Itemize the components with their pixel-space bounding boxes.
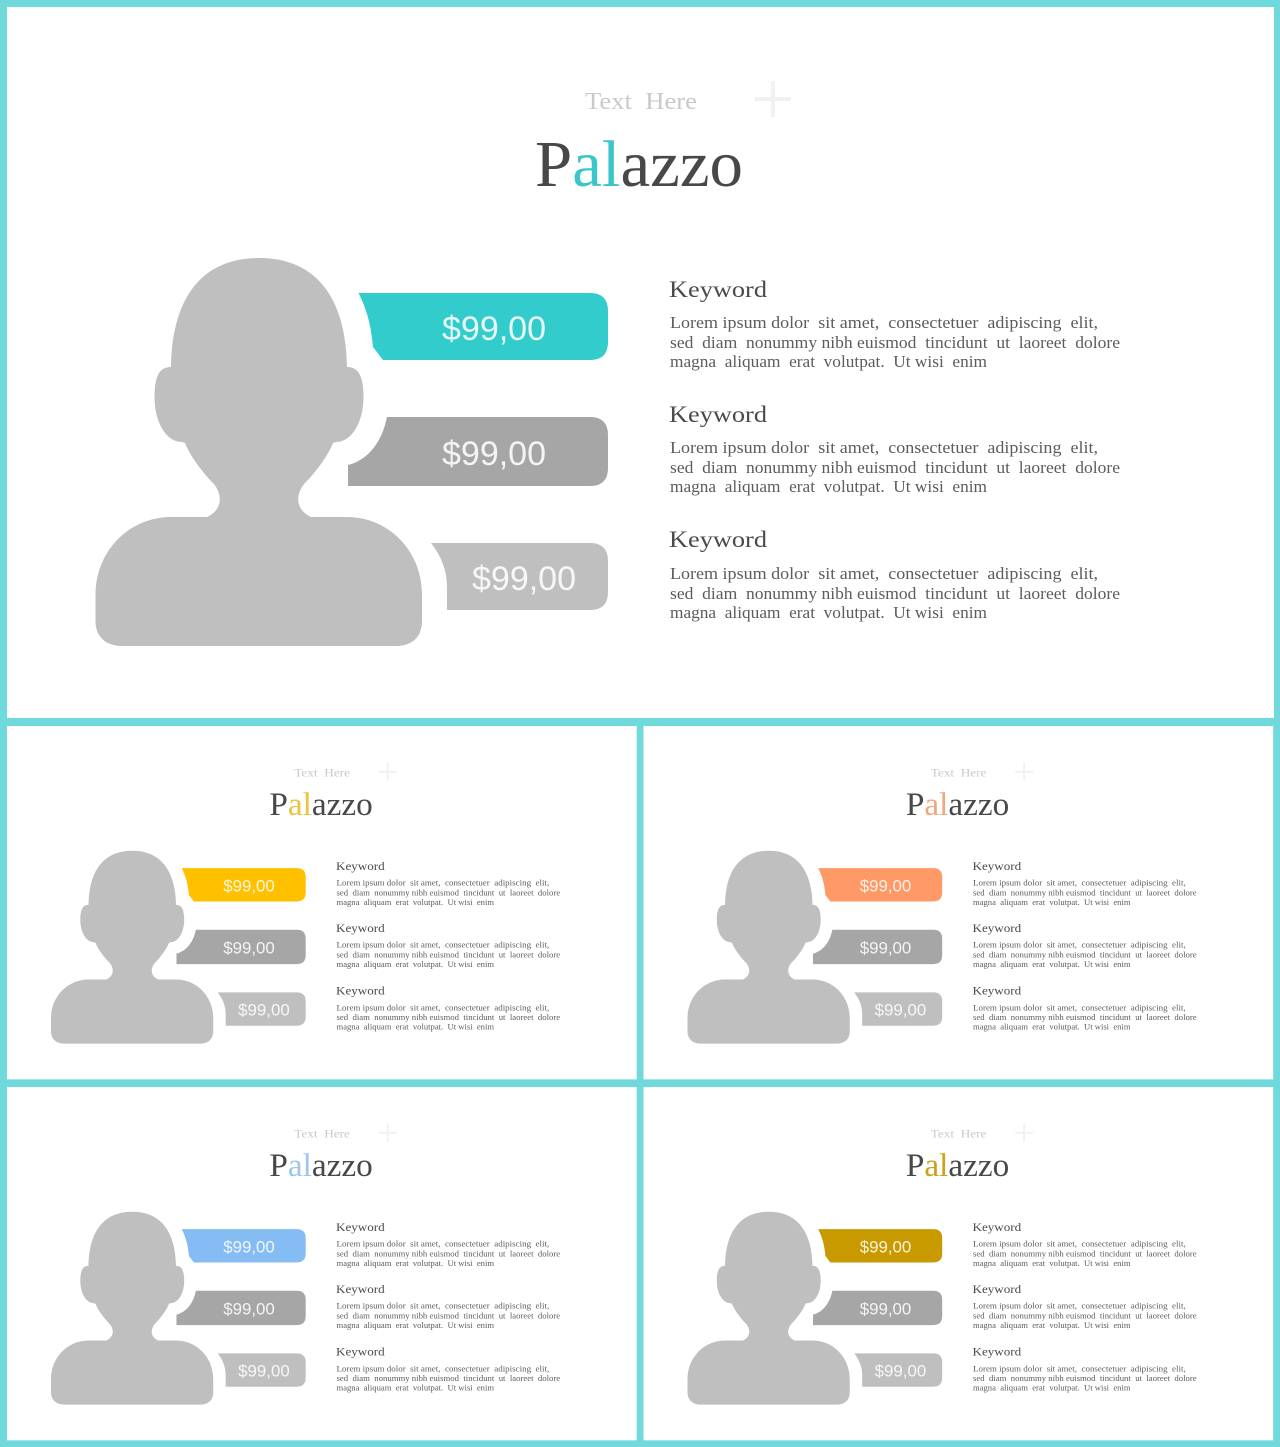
subtitle: Text Here — [585, 89, 697, 115]
price tag 3 — [218, 992, 306, 1026]
text block 2: Lorem ipsum dolor sit amet, consectetuer adipiscing elit, — [973, 940, 1186, 950]
text block 3: Lorem ipsum dolor sit amet, consectetuer adipiscing elit, — [973, 1002, 1186, 1012]
title: Palazzo — [906, 787, 1009, 823]
text block 2: sed diam nonummy nibh euismod tincidunt ut laoreet dolore — [337, 1311, 560, 1321]
price tag 3 — [854, 1353, 942, 1387]
text block 2 — [336, 1283, 560, 1330]
text block 3: Lorem ipsum dolor sit amet, consectetuer adipiscing elit, — [337, 1002, 549, 1012]
price tag 2: $99,00 — [223, 939, 275, 958]
price tag 1 — [182, 868, 306, 901]
text block 3 — [669, 527, 1120, 622]
text block 3: magna aliquam erat volutpat. Ut wisi enim — [337, 1022, 495, 1032]
price tag 2: $99,00 — [223, 1300, 275, 1319]
text block 3: Lorem ipsum dolor sit amet, consectetuer adipiscing elit, — [337, 1363, 549, 1373]
text block 1: Keyword — [973, 1221, 1021, 1234]
text block 1: Lorem ipsum dolor sit amet, consectetuer adipiscing elit, — [670, 313, 1098, 332]
text block 1: Keyword — [669, 277, 767, 303]
text block 1: Lorem ipsum dolor sit amet, consectetuer adipiscing elit, — [337, 1239, 549, 1249]
text block 1: Keyword — [973, 860, 1021, 873]
text block 1: sed diam nonummy nibh euismod tincidunt ut laoreet dolore — [973, 887, 1197, 897]
text block 2: magna aliquam erat volutpat. Ut wisi enim — [973, 1320, 1131, 1330]
text block 2: magna aliquam erat volutpat. Ut wisi enim — [973, 959, 1131, 969]
text block 2: Lorem ipsum dolor sit amet, consectetuer adipiscing elit, — [337, 940, 549, 950]
text block 2: Keyword — [669, 402, 767, 428]
text block 2 — [669, 402, 1120, 496]
text block 3: sed diam nonummy nibh euismod tincidunt ut laoreet dolore — [670, 584, 1120, 603]
text block 1 — [973, 860, 1197, 907]
subtitle: Text Here — [294, 766, 350, 780]
text block 3: sed diam nonummy nibh euismod tincidunt ut laoreet dolore — [973, 1373, 1197, 1383]
text block 1 — [669, 277, 1120, 371]
price tag 1: $99,00 — [223, 1238, 275, 1257]
price tag 2 — [813, 1291, 942, 1325]
price tag 3: $99,00 — [875, 1001, 926, 1020]
icon: person silhouette — [687, 1212, 850, 1405]
text block 1 — [336, 860, 560, 907]
text block 1: Keyword — [336, 860, 385, 873]
text block 3: Keyword — [336, 1345, 385, 1358]
text block 3: Keyword — [669, 527, 767, 553]
price tag 2: $99,00 — [860, 1300, 911, 1319]
price tag 2 — [176, 1291, 306, 1325]
text block 2: Keyword — [973, 922, 1021, 935]
text block 3: Keyword — [973, 1345, 1021, 1358]
text block 3: Keyword — [973, 984, 1021, 997]
icon: plus — [379, 1124, 397, 1142]
panel: yellow slide — [7, 726, 637, 1079]
text block 3: sed diam nonummy nibh euismod tincidunt ut laoreet dolore — [337, 1373, 560, 1383]
title: Palazzo — [906, 1148, 1009, 1184]
text block 3: Lorem ipsum dolor sit amet, consectetuer adipiscing elit, — [670, 564, 1098, 583]
title: Palazzo — [269, 787, 373, 823]
price tag 2 — [176, 930, 306, 964]
icon: plus — [1015, 1124, 1033, 1142]
price tag 1 — [358, 293, 608, 360]
text block 1 — [973, 1221, 1197, 1268]
text block 1: magna aliquam erat volutpat. Ut wisi enim — [973, 897, 1131, 907]
title: Palazzo — [535, 128, 743, 201]
text block 2: sed diam nonummy nibh euismod tincidunt ut laoreet dolore — [670, 458, 1120, 477]
price tag 2 — [348, 417, 608, 486]
price tag 3 — [218, 1353, 306, 1387]
text block 3: Keyword — [336, 984, 385, 997]
text block 2: magna aliquam erat volutpat. Ut wisi enim — [337, 1320, 495, 1330]
price tag 1 — [818, 868, 942, 901]
text block 2: Keyword — [973, 1283, 1021, 1296]
text block 3: magna aliquam erat volutpat. Ut wisi enim — [973, 1022, 1131, 1032]
panel: blue slide — [7, 1087, 637, 1440]
panel: gold slide — [644, 1087, 1273, 1440]
price tag 3 — [854, 992, 942, 1026]
title: Palazzo — [269, 1148, 373, 1184]
text block 2: magna aliquam erat volutpat. Ut wisi enim — [337, 959, 495, 969]
text block 3: sed diam nonummy nibh euismod tincidunt ut laoreet dolore — [337, 1012, 560, 1022]
price tag 3: $99,00 — [238, 1001, 290, 1020]
text block 3 — [973, 1345, 1197, 1393]
text block 1: sed diam nonummy nibh euismod tincidunt ut laoreet dolore — [337, 1248, 560, 1258]
text block 2: Lorem ipsum dolor sit amet, consectetuer adipiscing elit, — [337, 1301, 549, 1311]
price tag 3 — [431, 543, 608, 610]
text block 3 — [973, 984, 1197, 1032]
text block 1: magna aliquam erat volutpat. Ut wisi enim — [337, 1258, 495, 1268]
text block 2: magna aliquam erat volutpat. Ut wisi enim — [670, 477, 987, 496]
text block 1: magna aliquam erat volutpat. Ut wisi enim — [337, 897, 495, 907]
panel: orange slide — [644, 726, 1273, 1079]
price tag 1 — [818, 1229, 942, 1262]
text block 2: sed diam nonummy nibh euismod tincidunt ut laoreet dolore — [973, 950, 1197, 960]
text block 3 — [336, 1345, 560, 1393]
price tag 1: $99,00 — [860, 1238, 911, 1257]
icon: person silhouette — [51, 1212, 213, 1405]
text block 1: magna aliquam erat volutpat. Ut wisi enim — [973, 1258, 1131, 1268]
icon: person silhouette — [96, 258, 422, 646]
subtitle: Text Here — [294, 1127, 350, 1141]
icon: plus — [755, 81, 791, 117]
text block 2: Keyword — [336, 1283, 385, 1296]
text block 2 — [336, 922, 560, 969]
text block 1: sed diam nonummy nibh euismod tincidunt ut laoreet dolore — [670, 333, 1120, 352]
text block 2: Lorem ipsum dolor sit amet, consectetuer adipiscing elit, — [670, 438, 1098, 457]
icon: plus — [379, 763, 397, 781]
panel: main slide teal — [7, 7, 1274, 718]
subtitle: Text Here — [931, 766, 986, 780]
icon: plus — [1015, 763, 1033, 781]
text block 2: Lorem ipsum dolor sit amet, consectetuer adipiscing elit, — [973, 1301, 1186, 1311]
price tag 3: $99,00 — [472, 560, 576, 598]
text block 2: Keyword — [336, 922, 385, 935]
icon: person silhouette — [51, 851, 213, 1044]
text block 2: sed diam nonummy nibh euismod tincidunt ut laoreet dolore — [973, 1311, 1197, 1321]
text block 2: sed diam nonummy nibh euismod tincidunt ut laoreet dolore — [337, 950, 560, 960]
text block 1: sed diam nonummy nibh euismod tincidunt ut laoreet dolore — [337, 887, 560, 897]
text block 1: sed diam nonummy nibh euismod tincidunt ut laoreet dolore — [973, 1248, 1197, 1258]
text block 1: Keyword — [336, 1221, 385, 1234]
icon: person silhouette — [687, 851, 850, 1044]
text block 1: Lorem ipsum dolor sit amet, consectetuer adipiscing elit, — [973, 1239, 1186, 1249]
text block 3 — [336, 984, 560, 1032]
text block 3: Lorem ipsum dolor sit amet, consectetuer adipiscing elit, — [973, 1363, 1186, 1373]
text block 2 — [973, 922, 1197, 969]
price tag 2: $99,00 — [442, 435, 546, 473]
text block 1: Lorem ipsum dolor sit amet, consectetuer adipiscing elit, — [973, 878, 1186, 888]
text block 3: magna aliquam erat volutpat. Ut wisi enim — [973, 1383, 1131, 1393]
price tag 3: $99,00 — [238, 1362, 290, 1381]
text block 3: magna aliquam erat volutpat. Ut wisi enim — [670, 603, 987, 622]
price tag 1: $99,00 — [223, 877, 275, 896]
text block 1: magna aliquam erat volutpat. Ut wisi enim — [670, 352, 987, 371]
price tag 2 — [813, 930, 942, 964]
text block 2 — [973, 1283, 1197, 1330]
text block 1 — [336, 1221, 560, 1268]
price tag 1 — [182, 1229, 306, 1262]
price tag 1: $99,00 — [442, 310, 546, 348]
price tag 2: $99,00 — [860, 939, 911, 958]
text block 3: sed diam nonummy nibh euismod tincidunt ut laoreet dolore — [973, 1012, 1197, 1022]
price tag 1: $99,00 — [860, 877, 911, 896]
subtitle: Text Here — [931, 1127, 986, 1141]
text block 3: magna aliquam erat volutpat. Ut wisi enim — [337, 1383, 495, 1393]
price tag 3: $99,00 — [875, 1362, 926, 1381]
text block 1: Lorem ipsum dolor sit amet, consectetuer adipiscing elit, — [337, 878, 549, 888]
